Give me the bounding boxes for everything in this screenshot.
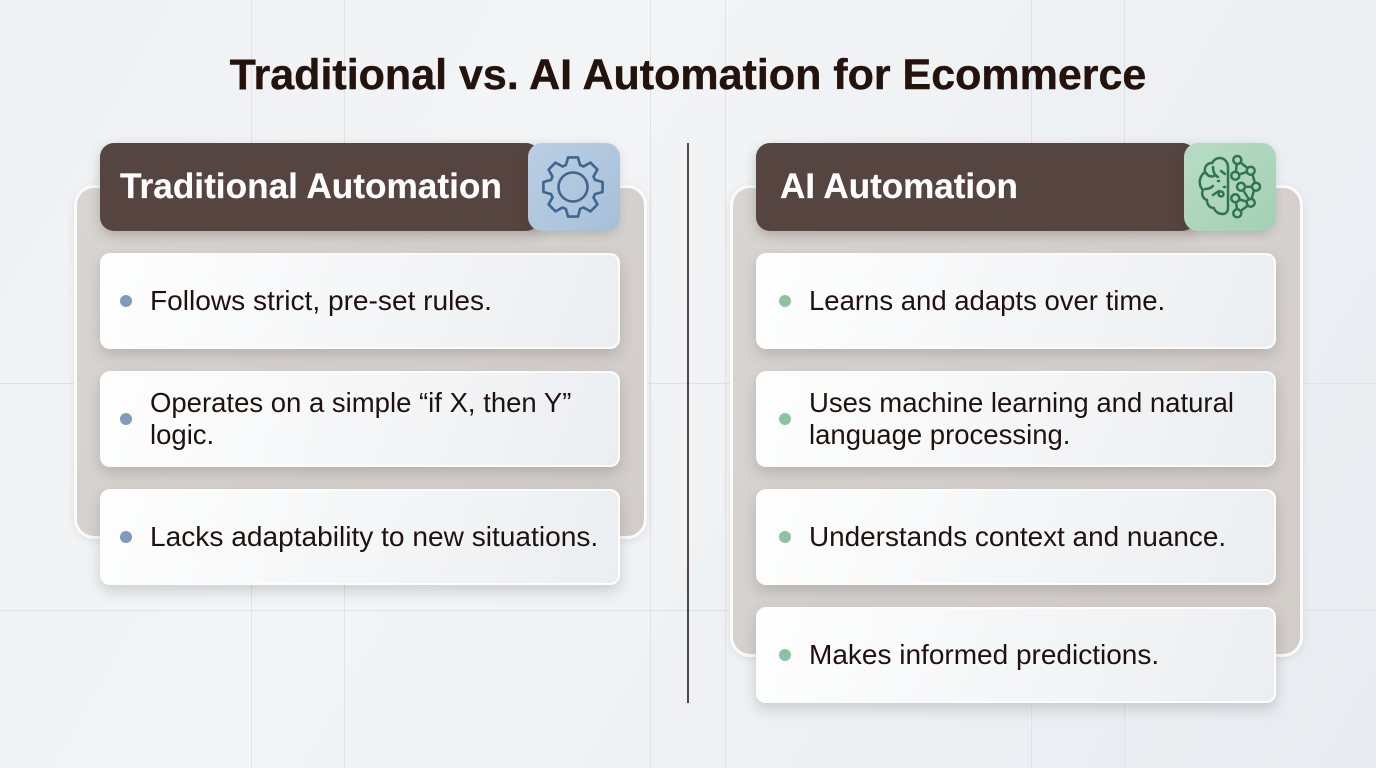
item: learns and adapts: Learns and adapts over time. — [809, 285, 1165, 316]
heading: traditional automation: Traditional Automation — [120, 167, 502, 206]
center divider — [687, 143, 689, 703]
heading: ai automation: AI Automation — [780, 167, 1018, 206]
panel background — [74, 185, 647, 539]
item: if x then y — [100, 371, 620, 467]
icon: brain network — [1184, 143, 1276, 231]
item: if x then y: Operates on a simple “if X, then Y” — [150, 387, 571, 418]
item: if x then y: logic. — [150, 419, 214, 450]
item: lacks adaptability: Lacks adaptability to new situations. — [150, 521, 598, 552]
item: strict rules: Follows strict, pre-set rules. — [150, 285, 492, 316]
item: informed predictions — [756, 607, 1276, 703]
item: machine learning: language processing. — [809, 419, 1070, 450]
heading: traditional automation — [100, 143, 540, 231]
item: context and nuance — [756, 489, 1276, 585]
heading: ai automation — [756, 143, 1196, 231]
item: machine learning: Uses machine learning and natural — [809, 387, 1234, 418]
item: informed predictions: Makes informed predictions. — [809, 639, 1159, 670]
item: machine learning — [756, 371, 1276, 467]
item: context and nuance: Understands context and nuance. — [809, 521, 1226, 552]
item: strict rules — [100, 253, 620, 349]
title: Traditional vs. AI Automation for Ecommerce — [230, 51, 1146, 99]
panel: traditional automation — [73, 185, 648, 542]
panel: ai automation — [729, 185, 1304, 660]
item: learns and adapts — [756, 253, 1276, 349]
icon: gear — [528, 143, 620, 231]
panel background — [730, 185, 1303, 657]
item: lacks adaptability — [100, 489, 620, 585]
